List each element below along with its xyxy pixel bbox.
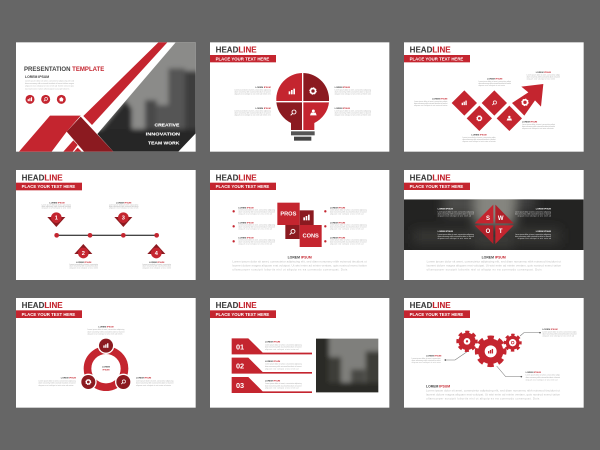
right list: aliquam erat volutpat ut wisi enim ad	[330, 213, 363, 216]
text block: S: LOREM IPSUM	[438, 209, 453, 211]
text block: top right: aliquam erat volutpat ut wisi enim ad	[542, 334, 574, 337]
bottom text block	[232, 255, 367, 271]
subtitle bar: PLACE YOUR TEXT HERE	[22, 312, 76, 318]
row 01: diam nonummy nibh euismod tincidunt ut laoreet	[265, 346, 302, 349]
marker 3	[114, 212, 132, 227]
text block: W: diam nonummy nibh euismod tincidunt ut laoreet	[515, 213, 552, 216]
timeline axis	[54, 233, 159, 238]
panel: ring cycle	[16, 298, 196, 408]
subtitle bar	[210, 183, 276, 190]
text block: top	[478, 79, 512, 87]
text block 4: Lorem ipsum dolor sit amet, consectetur	[142, 263, 171, 266]
left list: LOREM IPSUM	[238, 222, 254, 224]
text block: S: aliquam erat volutpat ut wisi enim ad	[438, 215, 471, 218]
left list: aliquam erat volutpat ut wisi enim ad	[238, 213, 272, 216]
text block: left	[414, 99, 448, 107]
subtitle bar	[210, 310, 276, 318]
text block: left: diam nonummy nibh euismod tincidunt ut laoreet	[38, 382, 76, 385]
text block: S: diam nonummy nibh euismod tincidunt ut laoreet	[438, 213, 475, 216]
text block: top: aliquam erat volutpat ut wisi enim ad minim	[87, 333, 123, 336]
bottom text block: ullamcorper suscipit lobortis nisl ut aliquip ex ea commodo consequat. Duis	[426, 396, 540, 400]
heading: HEADLINE	[216, 44, 257, 54]
cover body text: nostrud exerci tation ullamcorper suscipit lobortis	[25, 87, 69, 90]
SWOT diamond: S	[486, 216, 490, 222]
right list: LOREM IPSUM	[330, 222, 345, 224]
text block: left: Lorem ipsum dolor sit amet, consectetur	[412, 357, 441, 360]
text block: left	[412, 356, 442, 364]
slide background	[404, 42, 584, 152]
text block 1	[42, 202, 72, 210]
ring centre label	[102, 366, 110, 371]
text block: top left	[234, 87, 271, 95]
text block: top: LOREM IPSUM	[98, 326, 114, 328]
row 03: diam nonummy nibh euismod tincidunt ut laoreet	[265, 384, 302, 387]
text block: S: Lorem ipsum dolor sit amet, consectetur adipiscing	[438, 211, 474, 214]
ring centre label: IPSUM	[103, 369, 110, 371]
text block: bottom right: diam nonummy nibh euismod tincidunt ut laoreet	[526, 376, 561, 379]
diamond 4	[497, 106, 522, 131]
text block: bottom: Lorem ipsum dolor sit amet, consectetur adipis	[462, 136, 496, 139]
slide background	[404, 170, 584, 280]
panel: pros and cons	[210, 170, 389, 280]
heading: HEADLINE	[410, 172, 451, 182]
diamond 2	[467, 106, 492, 131]
heading: HEADLINE	[216, 300, 257, 310]
text block: right	[522, 122, 556, 130]
row 01: 01	[236, 342, 244, 351]
subtitle bar: PLACE YOUR TEXT HERE	[216, 184, 270, 190]
SWOT diamond: T	[499, 229, 503, 235]
cover body text	[25, 79, 74, 90]
panel: gears	[404, 298, 584, 408]
row 02: aliquam erat volutpat ut wisi enim ad	[265, 367, 298, 370]
text block: bottom: aliquam erat volutpat ut wisi enim ad minim	[462, 140, 496, 143]
right list	[324, 207, 367, 246]
text block: top right	[527, 72, 561, 80]
text block: bottom	[462, 135, 496, 143]
text block: top	[87, 326, 125, 336]
subtitle bar	[16, 183, 82, 190]
icon: search	[41, 95, 50, 104]
photo: blurred city	[316, 338, 378, 392]
ring	[87, 350, 124, 387]
text block: top: diam nonummy nibh euismod tincidunt ut laoreet	[478, 82, 512, 85]
text block 3: LOREM IPSUM	[116, 202, 131, 204]
right gear	[505, 335, 520, 350]
text block: T	[515, 231, 552, 240]
bottom text block: LOREM IPSUM	[426, 385, 450, 389]
heading: HEADLINE	[22, 300, 63, 310]
text block: O: diam nonummy nibh euismod tincidunt ut laoreet	[438, 235, 475, 238]
text block: bottom right: Lorem ipsum dolor sit amet, consectetur adipiscing	[335, 109, 371, 112]
lower red stripe	[63, 140, 78, 152]
slide background	[16, 170, 196, 280]
row 02	[232, 358, 312, 374]
text block: W: aliquam erat volutpat ut wisi enim ad	[518, 215, 551, 218]
cover title: PRESENTATION TEMPLATE	[24, 67, 104, 73]
bottom text block	[426, 385, 560, 400]
row 03: Lorem ipsum dolor sit amet, consectetur adipiscing	[265, 382, 302, 385]
right list: diam nonummy nibh euismod tincidunt ut laoreet	[330, 241, 367, 244]
icon square: search	[285, 225, 300, 239]
text block: top right: LOREM IPSUM	[542, 329, 558, 331]
arrow	[512, 84, 543, 116]
text block: left: aliquam erat volutpat ut wisi enim ad minim	[38, 384, 74, 387]
subtitle bar: PLACE YOUR TEXT HERE	[410, 184, 464, 190]
row 03	[232, 377, 312, 393]
text block: left: LOREM IPSUM	[426, 356, 442, 358]
left list: Lorem ipsum dolor sit amet, consectetur adipiscing	[238, 209, 275, 212]
text block: top: LOREM IPSUM	[487, 79, 502, 81]
cover background	[16, 42, 196, 152]
text block: bottom left	[234, 108, 271, 116]
text block 2: Lorem ipsum dolor sit amet, consectetur	[69, 263, 98, 266]
cover body text: aliquam erat volutpat ut wisi enim ad minim veniam quis	[25, 85, 74, 88]
right list: LOREM IPSUM	[330, 207, 345, 209]
row 02: 02	[236, 362, 244, 371]
panel: timeline	[16, 170, 196, 280]
row 01	[232, 338, 312, 354]
text block 3: diam nonummy nibh euismod tincidunt	[109, 205, 139, 208]
text block 4	[142, 262, 172, 269]
row 03: 03	[236, 381, 244, 390]
subtitle bar: PLACE YOUR TEXT HERE	[410, 312, 464, 318]
text block: top right: diam nonummy nibh euismod tincidunt ut laoreet	[542, 332, 577, 335]
bottom text block: ullamcorper suscipit lobortis nisl ut aliquip ex ea commodo consequat. Duis	[427, 267, 542, 271]
icon square: bars	[300, 210, 314, 225]
cons square: CONS	[302, 234, 319, 240]
text block: bottom left: Lorem ipsum dolor sit amet, consectetur adipiscing	[234, 109, 271, 112]
left list: Lorem ipsum dolor sit amet, consectetur adipiscing	[238, 239, 275, 242]
text block: bottom: diam nonummy nibh euismod tincidunt ut laoreet	[462, 138, 496, 141]
text block: left: LOREM IPSUM	[432, 99, 448, 101]
text block: top right: diam nonummy nibh euismod tincidunt ut laoreet	[527, 75, 561, 78]
bottom text block: LOREM IPSUM	[288, 255, 312, 259]
text block: W: LOREM IPSUM	[536, 209, 551, 211]
row 01: aliquam erat volutpat ut wisi enim ad	[265, 348, 298, 351]
dark photo band	[404, 199, 584, 250]
icon: home	[57, 95, 66, 104]
left list: aliquam erat volutpat ut wisi enim ad	[238, 228, 272, 231]
right list: LOREM IPSUM	[330, 237, 345, 239]
slide background	[16, 298, 196, 408]
text block: bottom right: aliquam erat volutpat ut wisi enim ad	[526, 378, 557, 381]
red diagonal stripe	[83, 42, 167, 125]
red corner piece	[74, 148, 82, 152]
text block 3: aliquam erat volutpat ut wisi enim	[109, 207, 139, 210]
bulb chart	[276, 73, 329, 141]
cover body text: diam nonummy nibh euismod tincidunt ut laoreet dolore magna	[25, 82, 74, 85]
row 03: aliquam erat volutpat ut wisi enim ad	[265, 387, 298, 390]
right list: aliquam erat volutpat ut wisi enim ad	[330, 243, 363, 246]
text block: left: aliquam erat volutpat ut wisi enim	[412, 361, 441, 364]
dark red band	[67, 117, 113, 152]
marker 2: 2	[82, 251, 85, 257]
marker 3: 3	[122, 216, 125, 222]
text block: top right: aliquam erat volutpat ut wisi enim	[527, 77, 556, 80]
text block: top left: diam nonummy nibh euismod tincidunt ut laoreet	[234, 90, 271, 93]
panel: numbered list with photo	[210, 298, 389, 408]
left list: diam nonummy nibh euismod tincidunt ut laoreet	[238, 226, 276, 229]
text block 4: aliquam erat volutpat ut wisi enim	[142, 266, 172, 269]
text block 2	[69, 262, 99, 269]
text block: left: aliquam erat volutpat ut wisi enim ad minim	[414, 104, 448, 107]
text block: O: LOREM IPSUM	[438, 231, 453, 233]
text block: top left: aliquam erat volutpat ut wisi enim ad minim veni	[234, 92, 271, 95]
text block: right: aliquam erat volutpat ut wisi enim ad minim	[522, 127, 554, 130]
slide background	[210, 170, 389, 280]
text block: bottom left: aliquam erat volutpat ut wisi enim ad minim veni	[234, 113, 271, 116]
text block: right: LOREM IPSUM	[522, 122, 537, 124]
bottom text block: Lorem ipsum dolor sit amet, consectetur adipiscing elit, sed diam nonummy nibh euismod tincidunt ut	[427, 259, 561, 263]
text block: right	[136, 378, 174, 387]
row 03: LOREM IPSUM	[265, 380, 280, 382]
text block: top right	[335, 87, 372, 95]
subtitle bar: PLACE YOUR TEXT HERE	[216, 56, 270, 62]
text block: top: Lorem ipsum dolor sit amet, consectetur adipiscing	[87, 328, 124, 331]
cover keywords	[146, 122, 180, 146]
panel: SWOT	[404, 170, 584, 280]
text block: right: aliquam erat volutpat ut wisi enim ad minim	[136, 384, 172, 387]
text block: S	[438, 209, 475, 218]
text block: right: Lorem ipsum dolor sit amet, consectetur adipis	[522, 123, 555, 126]
subtitle bar: PLACE YOUR TEXT HERE	[22, 184, 76, 190]
text block: bottom left: LOREM IPSUM	[255, 108, 271, 110]
cover photo: blurred city	[98, 42, 196, 152]
large gear	[477, 338, 504, 365]
text block 4: LOREM IPSUM	[149, 262, 164, 264]
right list: aliquam erat volutpat ut wisi enim ad	[330, 228, 363, 231]
text block: right: Lorem ipsum dolor sit amet, consectetur adipiscing	[136, 379, 173, 382]
text block: left: diam nonummy nibh euismod tincidunt ut laoreet	[414, 102, 448, 105]
marker 1	[47, 212, 65, 227]
cover keywords: INNOVATION	[146, 131, 180, 137]
connector: top right	[520, 332, 541, 336]
SWOT diamond	[475, 205, 514, 244]
text block: left: Lorem ipsum dolor sit amet, consectetur adipiscing	[38, 379, 76, 382]
subtitle bar	[16, 310, 82, 318]
text block: left	[38, 378, 76, 387]
text block: T: aliquam erat volutpat ut wisi enim ad	[518, 237, 551, 240]
text block: bottom right: Lorem ipsum dolor sit amet, consectetur adipis	[526, 374, 560, 377]
text block: O	[438, 231, 475, 240]
text block: right: LOREM IPSUM	[136, 378, 151, 380]
text block: top right: Lorem ipsum dolor sit amet, consectetur adipis	[542, 330, 577, 333]
subtitle bar	[404, 310, 470, 318]
text block 3: Lorem ipsum dolor sit amet, consectetur	[109, 203, 139, 206]
text block: top right: LOREM IPSUM	[536, 72, 551, 74]
text block: top right: Lorem ipsum dolor sit amet, consectetur adipis	[527, 73, 560, 76]
row 02: LOREM IPSUM	[265, 361, 280, 363]
heading: HEADLINE	[22, 172, 63, 182]
bottom text block: laoreet dolore magna aliquam erat volutpat. Ut wisi enim ad minim veniam, quis nostrud exerci tation	[426, 392, 560, 396]
heading: HEADLINE	[410, 44, 451, 54]
connector: left	[444, 352, 467, 361]
text block: T: Lorem ipsum dolor sit amet, consectetur adipiscing	[515, 233, 551, 236]
cover subtitle: LOREM IPSUM	[25, 75, 49, 79]
left list: LOREM IPSUM	[238, 237, 254, 239]
text block: bottom right	[335, 108, 372, 116]
text block 4: diam nonummy nibh euismod tincidunt	[142, 265, 172, 268]
text block: top right: Lorem ipsum dolor sit amet, consectetur adipiscing	[335, 88, 371, 91]
left list: Lorem ipsum dolor sit amet, consectetur adipiscing	[238, 224, 275, 227]
right list: diam nonummy nibh euismod tincidunt ut laoreet	[330, 226, 367, 229]
SWOT diamond: O	[486, 229, 491, 235]
marker 4	[147, 244, 165, 258]
cover keywords: CREATIVE	[154, 122, 180, 128]
text block 1: aliquam erat volutpat ut wisi enim	[42, 207, 72, 210]
left gear	[458, 332, 476, 350]
text block: W	[515, 209, 552, 218]
connector: bottom right	[497, 366, 522, 377]
text block: bottom right: aliquam erat volutpat ut wisi enim ad minim veni	[335, 113, 372, 116]
node: gear	[80, 374, 97, 390]
text block: bottom right	[526, 372, 561, 381]
bottom text block: Lorem ipsum dolor sit amet, consectetur adipiscing elit, sed diam nonummy nibh euismod tincidunt ut	[426, 388, 560, 392]
text block: top left: LOREM IPSUM	[255, 87, 271, 89]
text block: bottom left: diam nonummy nibh euismod tincidunt ut laoreet	[234, 111, 271, 114]
text block: left: Lorem ipsum dolor sit amet, consectetur adipis	[414, 100, 447, 103]
right list: Lorem ipsum dolor sit amet, consectetur adipiscing	[330, 209, 367, 212]
text block 3	[109, 202, 139, 210]
text block: top right	[542, 329, 577, 337]
text block 1: Lorem ipsum dolor sit amet, consectetur	[42, 203, 71, 206]
row 02: diam nonummy nibh euismod tincidunt ut laoreet	[265, 365, 302, 368]
diamond 1	[452, 90, 477, 116]
subtitle bar: PLACE YOUR TEXT HERE	[216, 312, 270, 318]
bottom text block: laoreet dolore magna aliquam erat volutpat. Ut wisi enim ad minim veniam, quis nostrud exerci tation	[427, 263, 561, 267]
text block 1: LOREM IPSUM	[49, 202, 65, 204]
left list: aliquam erat volutpat ut wisi enim ad	[238, 243, 272, 246]
node: bars	[98, 337, 114, 354]
SWOT diamond: W	[498, 216, 504, 222]
panel: diamond arrow	[404, 42, 584, 152]
text block: O: Lorem ipsum dolor sit amet, consectetur adipiscing	[438, 233, 474, 236]
text block: right: diam nonummy nibh euismod tincidunt ut laoreet	[522, 125, 556, 128]
text block: O: aliquam erat volutpat ut wisi enim ad	[438, 237, 471, 240]
row 02: Lorem ipsum dolor sit amet, consectetur adipiscing	[265, 363, 302, 366]
right list: Lorem ipsum dolor sit amet, consectetur adipiscing	[330, 224, 367, 227]
red chevron shape	[19, 116, 81, 152]
text block: left: LOREM IPSUM	[61, 378, 76, 380]
text block: T: diam nonummy nibh euismod tincidunt ut laoreet	[515, 235, 552, 238]
text block: top: aliquam erat volutpat ut wisi enim	[478, 84, 506, 87]
marker 2	[74, 244, 92, 258]
panel: presentation template cover	[16, 42, 196, 152]
text block 1: diam nonummy nibh euismod tincidunt	[42, 205, 72, 208]
left list: diam nonummy nibh euismod tincidunt ut laoreet	[238, 211, 276, 214]
text block: bottom right: LOREM IPSUM	[335, 108, 350, 110]
bottom text block	[427, 255, 561, 271]
left list: diam nonummy nibh euismod tincidunt ut laoreet	[238, 241, 276, 244]
subtitle bar	[404, 183, 470, 190]
subtitle bar: PLACE YOUR TEXT HERE	[410, 56, 464, 62]
text block: T: LOREM IPSUM	[536, 231, 551, 233]
right list: diam nonummy nibh euismod tincidunt ut laoreet	[330, 211, 367, 214]
row 01: Lorem ipsum dolor sit amet, consectetur adipiscing	[265, 343, 302, 346]
right list: Lorem ipsum dolor sit amet, consectetur adipiscing	[330, 239, 367, 242]
text block: bottom right: LOREM IPSUM	[526, 372, 541, 374]
slide background	[404, 298, 584, 408]
row 01: LOREM IPSUM	[265, 342, 280, 344]
bottom text block: LOREM IPSUM	[482, 255, 506, 259]
marker 1: 1	[55, 216, 58, 222]
text block: left: diam nonummy nibh euismod tincidunt	[412, 359, 441, 362]
text block 2: diam nonummy nibh euismod tincidunt	[69, 265, 99, 268]
pros square	[277, 203, 300, 225]
left list	[232, 207, 276, 246]
text block: W: Lorem ipsum dolor sit amet, consectetur adipiscing	[515, 211, 551, 214]
text block: bottom right: diam nonummy nibh euismod tincidunt ut laoreet	[335, 111, 372, 114]
bottom text block: laoreet dolore magna aliquam erat volutpat. Ut wisi enim ad minim veniam, quis nostrud exerci tation	[232, 263, 367, 267]
icon: bars	[25, 95, 34, 104]
subtitle bar	[210, 55, 276, 62]
heading: HEADLINE	[216, 172, 257, 182]
subtitle bar	[404, 55, 470, 62]
text block: top right: diam nonummy nibh euismod tincidunt ut laoreet	[335, 90, 372, 93]
bottom text block: ullamcorper suscipit lobortis nisl ut aliquip ex ea commodo consequat. Duis	[232, 267, 348, 271]
heading: HEADLINE	[410, 300, 451, 310]
cover keywords: TEAM WORK	[148, 140, 180, 146]
text block: top: diam nonummy nibh euismod tincidunt ut laoreet	[87, 330, 125, 333]
node: search	[115, 374, 132, 390]
slide background	[210, 298, 389, 408]
marker 4: 4	[155, 251, 159, 257]
text block 2: aliquam erat volutpat ut wisi enim	[69, 266, 99, 269]
pros square: PROS	[280, 212, 297, 218]
diamond 3	[482, 90, 507, 116]
bottom text block: Lorem ipsum dolor sit amet, consectetur adipiscing elit, sed diam nonummy nibh euismod tincidunt ut	[232, 259, 367, 263]
left list: LOREM IPSUM	[238, 207, 254, 209]
slide background	[210, 42, 389, 152]
text block: top right: LOREM IPSUM	[335, 87, 350, 89]
text block 2: LOREM IPSUM	[76, 262, 91, 264]
text block: right: diam nonummy nibh euismod tincidunt ut laoreet	[136, 382, 174, 385]
text block: top right: aliquam erat volutpat ut wisi enim ad minim veni	[335, 92, 372, 95]
cons square	[300, 225, 322, 247]
cover body text: Lorem ipsum dolor sit amet, consectetur adipiscing elit sed	[25, 79, 74, 82]
panel: light bulb	[210, 42, 389, 152]
text block: bottom: LOREM IPSUM	[471, 135, 487, 137]
text block: top left: Lorem ipsum dolor sit amet, consectetur adipiscing	[234, 88, 271, 91]
ring centre label: LOREM	[102, 366, 110, 368]
text block: top: Lorem ipsum dolor sit amet, consectetur adipis	[478, 80, 511, 83]
